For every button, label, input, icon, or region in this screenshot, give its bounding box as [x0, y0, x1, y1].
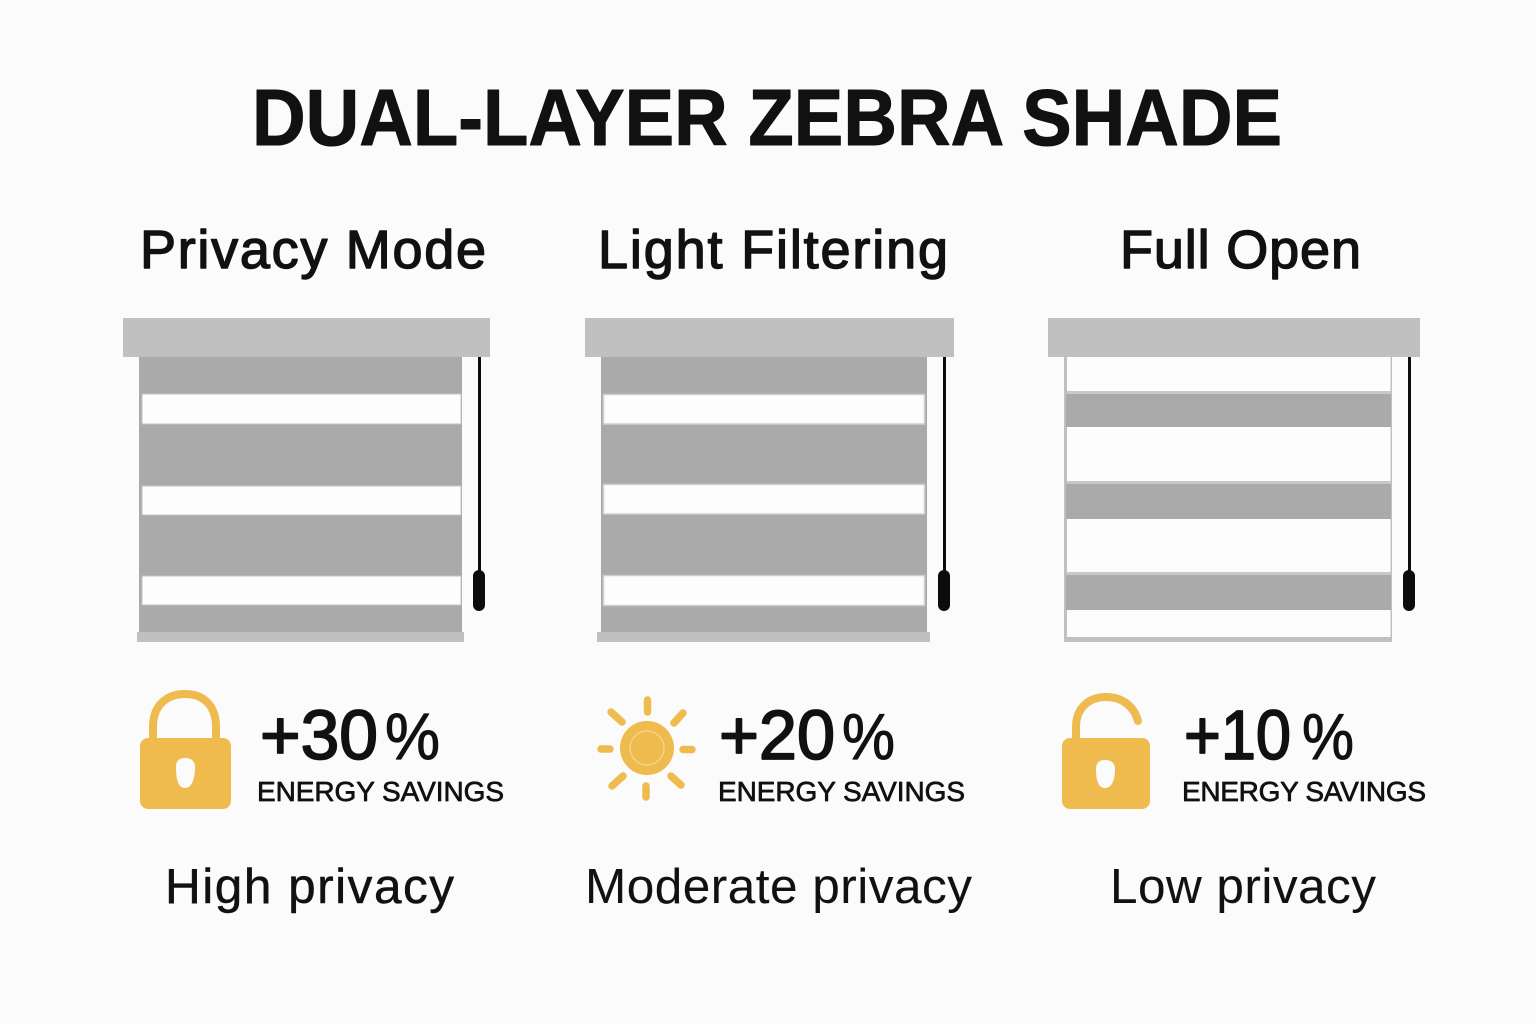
panel: light filtering [585, 220, 972, 914]
label: energy savings: ENERGY SAVINGS [257, 776, 504, 807]
panel: full open [1048, 220, 1426, 914]
stat: +30%: +30 [260, 696, 378, 774]
icon: sun [601, 700, 692, 797]
icon: open lock [1062, 697, 1150, 809]
panel: privacy mode [123, 220, 504, 914]
blind: privacy mode [123, 318, 490, 642]
label: moderate privacy: Moderate privacy [585, 859, 972, 914]
stat: +30% [260, 696, 440, 774]
label: high privacy: High privacy [165, 859, 454, 914]
blind: light filtering [585, 318, 954, 642]
stat: +30%: % [385, 699, 440, 773]
label: low privacy: Low privacy [1110, 859, 1376, 914]
title: DUAL-LAYER ZEBRA SHADE [252, 73, 1282, 162]
stat: +10%: +10 [1184, 696, 1291, 774]
heading: light filtering: Light Filtering [598, 220, 948, 280]
label: energy savings: ENERGY SAVINGS [718, 776, 965, 807]
stat: +10% [1184, 696, 1354, 774]
heading: privacy mode: Privacy Mode [140, 220, 486, 280]
stat: +20% [719, 696, 895, 774]
blind: full open [1048, 318, 1420, 642]
stat: +20%: % [842, 700, 895, 773]
stat: +10%: % [1302, 700, 1354, 773]
icon: closed lock [140, 694, 231, 809]
stat: +20%: +20 [719, 696, 835, 774]
label: energy savings: ENERGY SAVINGS [1182, 776, 1426, 807]
heading: full open: Full Open [1120, 220, 1361, 280]
